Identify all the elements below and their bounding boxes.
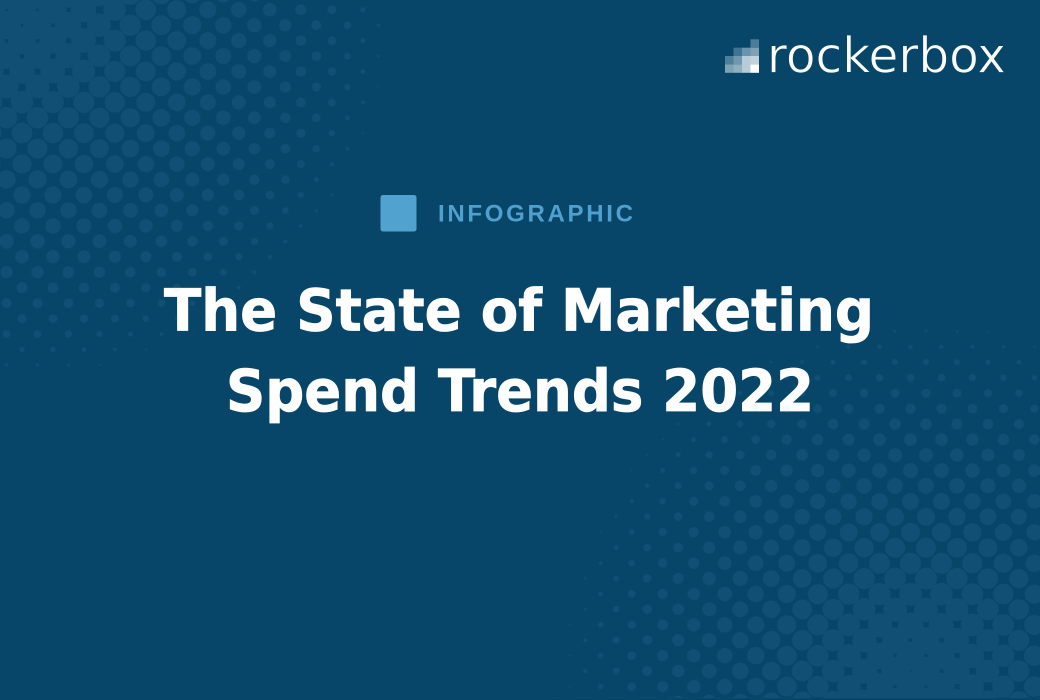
icon: pixel staircase mark bbox=[725, 39, 759, 73]
eyebrow: infographic tag bbox=[380, 195, 633, 232]
title bbox=[164, 278, 874, 425]
title line 2: Spend Trends 2022 bbox=[226, 358, 814, 425]
icon: blue square bbox=[380, 195, 416, 232]
eyebrow label: INFOGRAPHIC bbox=[438, 200, 633, 228]
title line 1: The State of Marketing bbox=[164, 278, 874, 344]
logo: rockerbox bbox=[725, 30, 1006, 80]
